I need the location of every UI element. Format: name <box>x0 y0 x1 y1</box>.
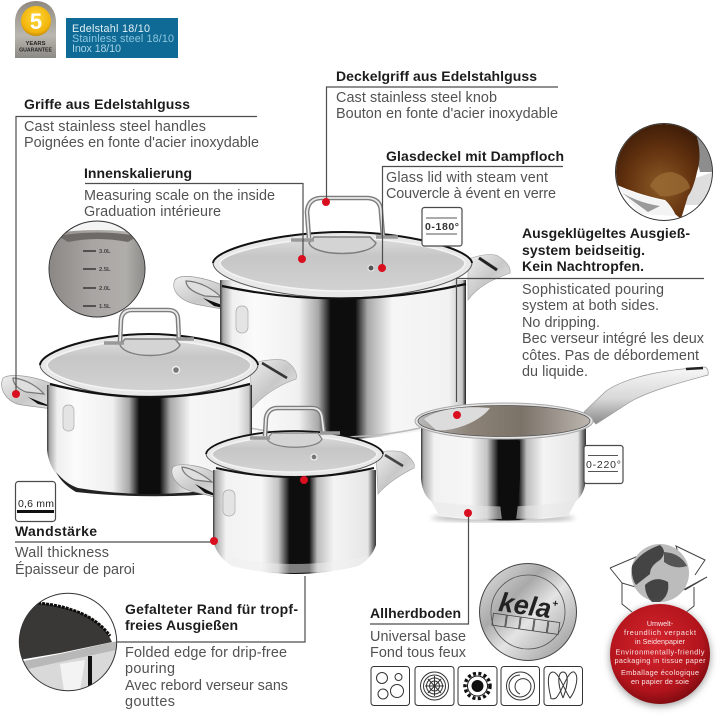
red packaging seal: Emballage écologique <box>621 668 699 677</box>
large pot base band <box>250 428 420 437</box>
badge: 0-220 degrees: 0-220° <box>586 459 621 471</box>
inset: folded edge <box>19 593 117 691</box>
material label <box>66 18 178 58</box>
callout: pouring system: No dripping. <box>522 315 600 331</box>
badge: wall thickness <box>16 482 56 522</box>
casserole base shadow <box>56 472 225 496</box>
callout: universal base: Fond tous feux <box>370 645 467 661</box>
medium casserole <box>2 310 297 496</box>
small pot body <box>213 470 376 574</box>
cooktop icon: ceramic <box>371 666 410 706</box>
guarantee badge: YEARS <box>26 41 46 47</box>
saucepan handle slot <box>686 368 703 369</box>
large pot lid knob <box>291 198 398 240</box>
small pot right handle <box>376 451 414 494</box>
callout: folded edge: Gefalteter Rand für tropf- <box>125 601 298 617</box>
large pot body <box>220 280 466 440</box>
globe <box>631 544 689 602</box>
callout: glass lid: Couvercle à évent en verre <box>386 186 556 202</box>
kela base disc: + <box>552 598 559 610</box>
callout: pouring system: system beidseitig. <box>522 242 645 258</box>
callout: wall thickness: Wall thickness <box>15 545 109 561</box>
red packaging seal: in Seidenpapier <box>635 637 686 646</box>
callout: wall thickness: Wandstärke <box>15 523 97 539</box>
material label: Inox 18/10 <box>72 43 121 55</box>
inset: sauce pouring <box>612 124 713 222</box>
callout: lid knob <box>322 68 558 206</box>
red packaging seal: Environmentally-friendly <box>616 648 705 656</box>
red packaging seal: en papier de soie <box>631 677 689 686</box>
callout: pouring system <box>453 225 705 419</box>
cooktop icon: gas <box>458 666 497 706</box>
small pot base band <box>222 556 368 573</box>
callout: universal base: Allherdboden <box>370 605 461 621</box>
callout: wall thickness <box>15 523 218 578</box>
callout: pouring system: côtes. Pas de débordement <box>522 348 699 364</box>
saucepan interior <box>418 406 590 436</box>
small pot lid knob <box>250 408 340 438</box>
saucepan handle <box>584 367 708 424</box>
badge: wall thickness: 0,6 mm <box>18 498 54 510</box>
casserole right handle <box>250 360 297 408</box>
callout: pouring system: system at both sides. <box>522 298 659 314</box>
callout: inner scale: Measuring scale on the inside <box>84 188 275 204</box>
red packaging seal <box>610 604 710 706</box>
callout: folded edge <box>117 476 308 710</box>
cooktop icon: electric coil <box>544 666 582 706</box>
red packaging seal: freundlich verpackt <box>624 628 696 637</box>
saucepan stripe <box>498 441 520 520</box>
badge: 0-180 degrees <box>422 208 462 246</box>
callout: handles: Poignées en fonte d'acier inoxydable <box>24 135 259 151</box>
callout: handles <box>12 96 259 398</box>
large pot right handle <box>468 255 510 300</box>
callout: lid knob: Deckelgriff aus Edelstahlguss <box>336 68 537 84</box>
callout: pouring system: du liquide. <box>522 364 588 380</box>
large pot <box>174 198 510 440</box>
saucepan shadow <box>431 514 575 522</box>
saucepan <box>415 367 708 522</box>
guarantee badge: 5 <box>30 9 42 34</box>
callout: pouring system: Ausgeklügeltes Ausgieß- <box>522 225 690 241</box>
small pot left handle <box>172 465 234 500</box>
callout: inner scale: Innenskalierung <box>84 165 192 181</box>
large pot left handle <box>174 276 250 312</box>
lid vent <box>368 265 374 271</box>
small pot lid <box>206 431 383 477</box>
cooktop icon: induction <box>501 666 540 706</box>
callout: inner scale <box>84 165 306 263</box>
material label: Edelstahl 18/10 <box>72 23 150 35</box>
callout: inner scale: Graduation intérieure <box>84 204 221 220</box>
callout: folded edge: pouring <box>125 661 175 677</box>
callout: glass lid: Glasdeckel mit Dampfloch <box>386 148 564 164</box>
inset: measuring scale: 3.0L <box>99 249 111 255</box>
callout: pouring system: Kein Nachtropfen. <box>522 258 644 274</box>
callout: pouring system: Sophisticated pouring <box>522 282 664 298</box>
small pot handle lug <box>223 490 235 516</box>
box flaps <box>610 545 707 613</box>
large pot handle lug <box>236 306 248 333</box>
packaging box with globe <box>610 544 707 613</box>
callout: lid knob: Bouton en fonte d'acier inoxydable <box>336 106 558 122</box>
inset: measuring scale: 2.5L <box>99 267 111 273</box>
callout: folded edge: Folded edge for drip-free <box>125 645 287 661</box>
guarantee badge: GUARANTEE <box>19 48 52 54</box>
callout: glass lid <box>378 148 564 272</box>
casserole left handle <box>2 376 70 410</box>
callout: folded edge: Avec rebord verseur sans <box>125 678 288 694</box>
saucepan base band <box>432 501 575 519</box>
callout: lid knob: Cast stainless steel knob <box>336 90 497 106</box>
guarantee badge <box>15 1 56 58</box>
callout: handles: Griffe aus Edelstahlguss <box>24 96 190 112</box>
inset: measuring scale: 1.5L <box>99 304 111 310</box>
badge: 0-180 degrees: 0-180° <box>425 221 459 233</box>
red packaging seal: packaging in tissue paper <box>614 656 706 665</box>
cooktop icon: halogen <box>415 666 454 706</box>
kela base disc <box>480 564 576 660</box>
inset: measuring scale: 2.0L <box>99 286 111 292</box>
inset: measuring scale <box>49 221 145 317</box>
casserole body <box>47 385 252 495</box>
material label: Stainless steel 18/10 <box>72 33 174 45</box>
casserole lid knob <box>104 310 194 343</box>
callout: pouring system: Bec verseur intégré les deux <box>522 331 705 347</box>
callout: universal base: Universal base <box>370 629 466 645</box>
callout: handles: Cast stainless steel handles <box>24 119 206 135</box>
callout: glass lid: Glass lid with steam vent <box>386 170 548 186</box>
kela base disc: kela <box>497 587 553 624</box>
saucepan body <box>421 425 586 520</box>
casserole handle lug <box>63 405 74 431</box>
large pot lid <box>213 232 472 299</box>
saucepan rim <box>415 403 593 439</box>
red packaging seal: Umwelt- <box>647 619 674 628</box>
callout: universal base <box>370 509 472 661</box>
small pot <box>172 408 414 574</box>
callout: folded edge: freies Ausgießen <box>125 617 238 633</box>
callout: wall thickness: Épaisseur de paroi <box>15 561 135 578</box>
callout: folded edge: gouttes <box>125 694 175 710</box>
badge: 0-220 degrees <box>584 446 623 484</box>
casserole lid <box>40 334 258 397</box>
